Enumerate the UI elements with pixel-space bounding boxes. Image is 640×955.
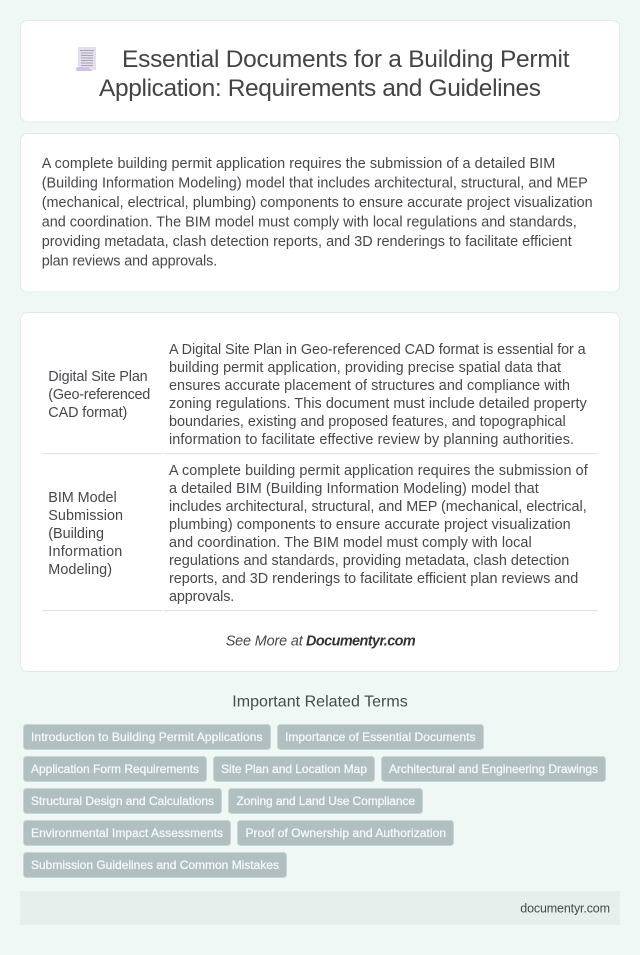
tag: importance bbox=[278, 724, 484, 750]
tag: site plan bbox=[214, 756, 374, 782]
row label: digital site plan bbox=[48, 369, 150, 421]
row description: digital site plan: building permit application, providing precise spatial data that bbox=[169, 360, 561, 376]
text block: introduction: plan reviews and approvals. bbox=[42, 254, 217, 270]
tag: drawings: Architectural and Engineering Drawings bbox=[389, 762, 598, 776]
title: Application: Requirements and Guidelines bbox=[99, 75, 541, 102]
tag: zoning bbox=[228, 788, 422, 814]
row description: BIM model submission: regulations and standards, providing metadata, clash detection bbox=[169, 553, 569, 569]
row label: BIM model submission bbox=[48, 490, 123, 578]
title: Essential Documents for a Building Permit bbox=[122, 46, 570, 73]
title bbox=[99, 46, 570, 102]
row description: BIM model submission: approvals. bbox=[169, 589, 234, 605]
row label: BIM model submission: BIM Model bbox=[48, 490, 117, 506]
tag: introduction: Introduction to Building Permit Applications bbox=[31, 730, 262, 744]
row label: BIM model submission: Information bbox=[48, 544, 122, 560]
row label: BIM model submission: (Building bbox=[48, 526, 104, 542]
row label: digital site plan: Digital Site Plan bbox=[48, 369, 148, 385]
tag: environmental bbox=[24, 820, 230, 846]
tag: submission: Submission Guidelines and Common Mistakes bbox=[31, 858, 279, 872]
footer bbox=[20, 891, 620, 925]
tag: application form bbox=[24, 756, 206, 782]
panel: introduction paragraph bbox=[20, 134, 620, 292]
link: see more: See More at bbox=[226, 634, 304, 650]
row description: BIM model submission: and coordination. The BIM model must comply with local bbox=[169, 535, 532, 551]
link: see more: Documentyr.com bbox=[306, 634, 416, 650]
panel: title card bbox=[20, 20, 620, 122]
heading: important related terms: Important Related Terms bbox=[232, 694, 408, 711]
tag: ownership bbox=[238, 820, 454, 846]
tag group: related terms bbox=[24, 724, 606, 878]
row description: BIM model submission: includes architectural, structural, and MEP (mechanical, electrical, bbox=[169, 499, 587, 515]
row label: digital site plan: (Geo-referenced bbox=[48, 387, 150, 403]
row description: digital site plan: A Digital Site Plan in Geo-referenced CAD format is essential for a bbox=[169, 342, 586, 358]
row description: digital site plan: ensures accurate placement of structures and compliance with bbox=[169, 378, 570, 394]
tag: zoning: Zoning and Land Use Compliance bbox=[236, 794, 415, 808]
text block: introduction: (mechanical, electrical, plumbing) components to ensure accurate project visualization bbox=[42, 195, 593, 211]
text block: introduction: and coordination. The BIM model must comply with local regulations and standards, bbox=[42, 214, 577, 230]
footer: documentyr.com bbox=[520, 901, 610, 915]
row description: digital site plan: information to facilitate effective review by planning authorities. bbox=[169, 432, 574, 448]
row label: digital site plan: CAD format) bbox=[48, 405, 127, 421]
table row: digital site plan bbox=[43, 342, 597, 454]
tag: importance: Importance of Essential Documents bbox=[285, 730, 476, 744]
row description: BIM model submission bbox=[169, 463, 589, 605]
tag: ownership: Proof of Ownership and Authorization bbox=[246, 826, 446, 840]
link: see more bbox=[226, 634, 416, 650]
tag: structural design bbox=[24, 788, 222, 814]
tag: introduction bbox=[24, 724, 270, 750]
row description: digital site plan bbox=[169, 342, 587, 448]
text block: introduction: A complete building permit application requires the submission of a detailed BIM bbox=[42, 156, 555, 172]
tag: site plan: Site Plan and Location Map bbox=[221, 762, 367, 776]
row description: BIM model submission: reports, and 3D renderings to facilitate efficient plan reviews and bbox=[169, 571, 578, 587]
tag: drawings bbox=[382, 756, 606, 782]
row description: BIM model submission: A complete building permit application requires the submission of bbox=[169, 463, 589, 479]
row description: digital site plan: boundaries, existing and proposed features, and topographical bbox=[169, 414, 566, 430]
table row: BIM model submission bbox=[43, 463, 597, 611]
row description: BIM model submission: a detailed BIM (Building Information Modeling) model that bbox=[169, 481, 539, 497]
text block: introduction: (Building Information Modeling) model that includes architectural, structural, and MEP bbox=[42, 176, 588, 192]
row description: BIM model submission: plumbing) components to ensure accurate project visualization bbox=[169, 517, 571, 533]
text block: introduction: providing metadata, clash detection reports, and 3D renderings to facilitate efficient bbox=[42, 234, 572, 250]
panel: documents table bbox=[20, 312, 620, 672]
text block: introduction bbox=[42, 156, 593, 270]
tag: submission bbox=[24, 852, 286, 878]
row label: BIM model submission: Modeling) bbox=[48, 562, 112, 578]
icon: document scroll bbox=[76, 47, 96, 71]
row description: digital site plan: zoning regulations. This document must include detailed property bbox=[169, 396, 587, 412]
tag: application form: Application Form Requirements bbox=[31, 762, 199, 776]
row label: BIM model submission: Submission bbox=[48, 508, 123, 524]
tag: environmental: Environmental Impact Assessments bbox=[31, 826, 223, 840]
tag: structural design: Structural Design and Calculations bbox=[31, 794, 214, 808]
